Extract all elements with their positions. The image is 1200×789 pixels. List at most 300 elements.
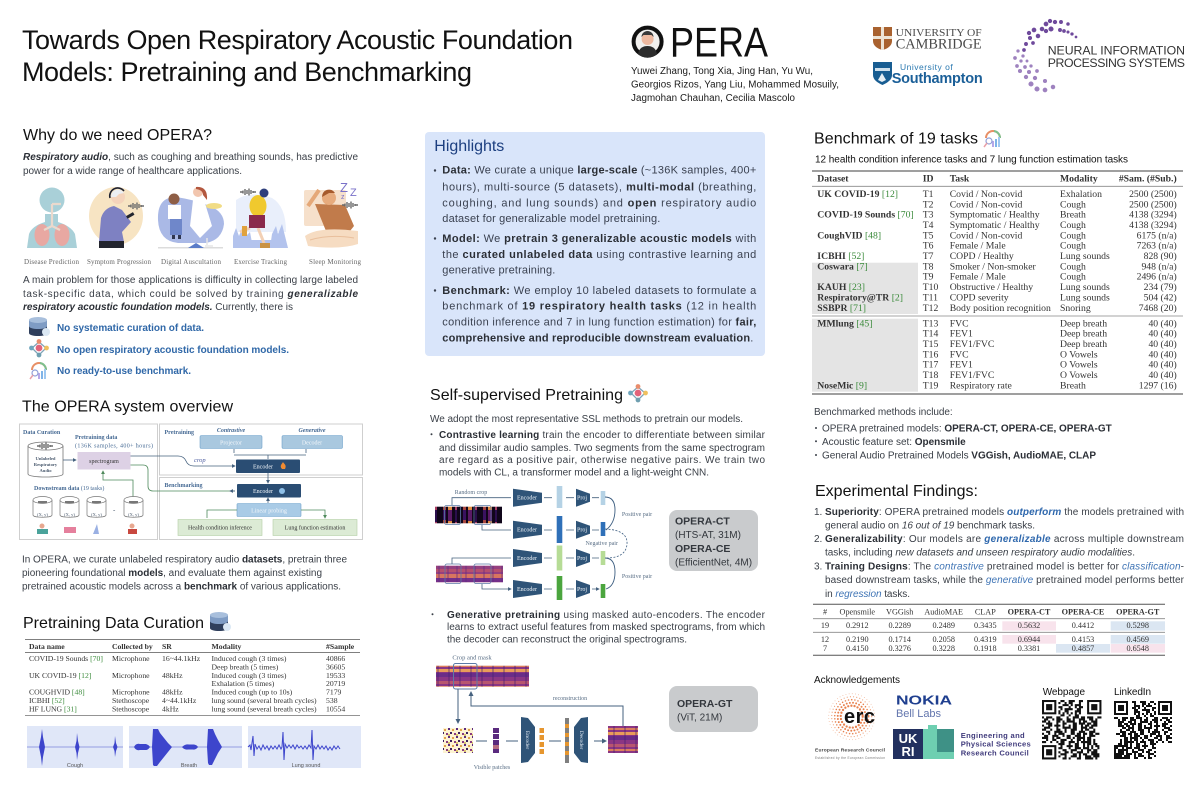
tasks table: Covid / Non-covid bbox=[950, 199, 1023, 210]
logo: UKRI EPSRC: RI bbox=[902, 744, 914, 759]
logo: NeurIPS bbox=[1014, 19, 1185, 92]
data table: lung sound (several breath cycles) bbox=[212, 696, 317, 705]
model box: OPERA-CT and OPERA-CE bbox=[669, 510, 758, 571]
model box: OPERA-GT: (ViT, 21M) bbox=[677, 712, 722, 724]
data table: SR bbox=[162, 642, 172, 651]
intro text: We adopt the most representative SSL methods to pretrain our models. bbox=[430, 414, 743, 425]
heading: Acknowledgements bbox=[814, 675, 900, 686]
system diagram bbox=[20, 424, 362, 540]
tasks table: T2 bbox=[923, 199, 934, 210]
results table: 0.6944 bbox=[1018, 635, 1040, 644]
logo: UKRI EPSRC: UK bbox=[899, 731, 918, 746]
gap: models: No open respiratory acoustic foundation models. bbox=[57, 345, 289, 356]
data table: 16~44.1kHz bbox=[162, 654, 201, 663]
tasks table: 40 (40) bbox=[1148, 349, 1177, 360]
contrastive diagram: Random crop bbox=[455, 490, 487, 496]
generative text: Generative pretraining using masked auto-encoders. The encoder bbox=[447, 610, 766, 621]
system diagram: Decoder bbox=[302, 440, 322, 446]
finding: superiority: 1. bbox=[814, 507, 822, 518]
finding: training designs: based downstream tasks, while the generative pretrained model performs better bbox=[825, 575, 1185, 586]
problem text: respiratory acoustic foundation models. Currently, there is bbox=[23, 302, 293, 313]
tasks table: UK COVID-19 [12] bbox=[817, 189, 898, 200]
data table: COUGHVID [48] bbox=[29, 688, 85, 696]
tasks table: COVID-19 Sounds [70] bbox=[817, 210, 914, 221]
tasks table: T13 bbox=[923, 318, 938, 329]
system diagram: (X, y) bbox=[37, 512, 48, 518]
tasks table: T10 bbox=[923, 282, 938, 293]
benchmarked methods: OPERA pretrained models: OPERA-CT, OPERA-CE, OPERA-GT bbox=[822, 424, 1112, 434]
intro text: power for a wide range of healthcare applications. bbox=[23, 166, 242, 177]
heading: Benchmark of 19 tasks bbox=[814, 130, 978, 148]
highlight: data: Data: We curate a unique large-scale (~136K samples, 400+ bbox=[442, 165, 756, 177]
model box: OPERA-CT and OPERA-CE: OPERA-CT bbox=[675, 516, 730, 528]
system diagram: Pretraining bbox=[164, 430, 194, 436]
tasks table: COPD severity bbox=[950, 292, 1009, 303]
system diagram: Pretraining data bbox=[75, 435, 117, 441]
tasks table: Female / Male bbox=[950, 241, 1006, 252]
tasks table: Lung sounds bbox=[1060, 292, 1110, 303]
benchmarked methods: Acoustic feature set: Opensmile bbox=[822, 437, 966, 448]
generative diagram: reconstruction bbox=[553, 696, 587, 702]
data table: 48kHz bbox=[162, 671, 183, 680]
waveform: lung sound: Lung sound bbox=[292, 763, 320, 769]
contrastive diagram: Proj bbox=[577, 496, 587, 502]
tasks table: T17 bbox=[923, 360, 938, 371]
tasks table: Female / Male bbox=[950, 272, 1006, 283]
tasks table: Symptomatic / Healthy bbox=[950, 220, 1040, 231]
system diagram: Projector bbox=[220, 440, 242, 446]
icon captions: Symptom Progression bbox=[87, 258, 152, 266]
panel: self-supervised pretraining bbox=[430, 384, 766, 771]
tasks table: Cough bbox=[1060, 261, 1086, 272]
tasks table: T18 bbox=[923, 370, 938, 381]
system diagram: (X, y) bbox=[91, 512, 102, 518]
intro text: Respiratory audio, such as coughing and breathing sounds, has predictive bbox=[23, 152, 358, 163]
heading: Pretraining Data Curation bbox=[23, 615, 204, 632]
results table: 0.6548 bbox=[1126, 644, 1149, 653]
icon: network bbox=[628, 384, 648, 402]
tasks table: T11 bbox=[923, 292, 938, 303]
highlight: data bbox=[434, 165, 756, 225]
tasks table: Breath bbox=[1060, 381, 1086, 392]
gap list bbox=[29, 317, 289, 379]
logo: NeurIPS: NEURAL INFORMATION bbox=[1048, 44, 1185, 58]
tasks table: T16 bbox=[923, 349, 938, 360]
tasks table: FEV1 bbox=[950, 360, 973, 371]
tasks table: 40 (40) bbox=[1148, 329, 1177, 340]
tasks table: Deep breath bbox=[1060, 329, 1107, 340]
finding: training designs: in regression tasks. bbox=[825, 589, 910, 600]
data table: Data name bbox=[29, 642, 65, 651]
tasks table: Respiratory rate bbox=[950, 381, 1012, 392]
tasks table: 40 (40) bbox=[1148, 370, 1177, 381]
contrastive text: models with CL, a transformer model and a light-weight CNN. bbox=[439, 468, 709, 478]
model box: OPERA-CT and OPERA-CE: OPERA-CE bbox=[675, 543, 730, 555]
QR: LinkedIn: LinkedIn bbox=[1114, 687, 1151, 698]
tasks table: Cough bbox=[1060, 220, 1086, 231]
results table: 0.4412 bbox=[1072, 621, 1094, 630]
tasks table: Smoker / Non-smoker bbox=[950, 261, 1037, 272]
gap: benchmark: No ready-to-use benchmark. bbox=[57, 366, 191, 377]
tasks table bbox=[812, 171, 1183, 394]
benchmarked methods bbox=[814, 407, 1112, 462]
system diagram: Contrastive bbox=[217, 428, 246, 434]
panel: pretraining data curation bbox=[23, 612, 361, 769]
logo: University of Southampton bbox=[873, 62, 983, 87]
generative diagram: Decoder bbox=[578, 731, 584, 749]
icon captions bbox=[24, 258, 362, 266]
tasks table: 948 (n/a) bbox=[1141, 261, 1177, 272]
highlight: model: Model: We pretrain 3 generalizable acoustic models with bbox=[442, 233, 756, 245]
system diagram: Linear probing bbox=[251, 508, 287, 514]
tasks table: T8 bbox=[923, 261, 934, 272]
generative text bbox=[432, 610, 766, 646]
tasks table: 4138 (3294) bbox=[1129, 220, 1177, 231]
tasks table: 7263 (n/a) bbox=[1137, 241, 1177, 252]
data table: 19533 bbox=[326, 671, 345, 680]
results table: 0.5298 bbox=[1126, 621, 1149, 630]
logo: NeurIPS: PROCESSING SYSTEMS bbox=[1048, 56, 1185, 70]
results table bbox=[813, 604, 1165, 655]
finding: training designs: Training Designs: The contrastive pretrained model is better for classification- bbox=[825, 562, 1184, 572]
generative diagram bbox=[436, 654, 638, 771]
tasks table: Cough bbox=[1060, 241, 1086, 252]
data table: 7179 bbox=[326, 688, 342, 696]
system diagram: Lung function estimation bbox=[285, 524, 345, 532]
highlight: data: coughing, and lung sounds) and open respiratory audio bbox=[442, 197, 756, 209]
authors: Jagmohan Chauhan, Cecilia Mascolo bbox=[631, 93, 796, 104]
system diagram: Audio bbox=[39, 468, 52, 473]
tasks table: Lung sounds bbox=[1060, 282, 1110, 293]
title: Towards Open Respiratory Acoustic Foundation bbox=[22, 25, 573, 55]
tasks table: Respiratory@TR [2] bbox=[817, 292, 903, 303]
data table: 4~44.1kHz bbox=[162, 696, 197, 705]
tasks table: #Sam. (#Sub.) bbox=[1119, 174, 1177, 185]
tasks table: ICBHI [52] bbox=[817, 251, 864, 262]
finding: superiority bbox=[814, 507, 1184, 532]
QR: LinkedIn bbox=[1114, 687, 1172, 758]
highlight: model: the curated unlabeled data using contrastive learning and bbox=[442, 249, 756, 261]
data table: Deep breath (5 times) bbox=[212, 662, 279, 672]
overview description: In OPERA, we curate unlabeled respiratory audio datasets, pretrain three bbox=[22, 554, 347, 566]
results table: 0.5632 bbox=[1018, 621, 1040, 630]
icon: sleep monitoring: Z bbox=[340, 180, 348, 195]
tasks table: T12 bbox=[923, 303, 938, 314]
finding: superiority: Superiority: OPERA pretrained models outperform the models pretrained with bbox=[825, 507, 1184, 518]
results table: 0.2190 bbox=[846, 635, 869, 644]
tasks table: Snoring bbox=[1060, 303, 1091, 314]
tasks table: COPD / Healthy bbox=[950, 251, 1014, 262]
waveform: cough: Cough bbox=[67, 763, 83, 769]
contrastive diagram: Negative pair bbox=[585, 541, 618, 547]
tasks table: 4138 (3294) bbox=[1129, 210, 1177, 221]
panel: highlights bbox=[425, 132, 765, 356]
results table: 19 bbox=[821, 621, 829, 630]
results table: Opensmile bbox=[840, 608, 875, 616]
generative text: the decoder can reconstruct the original spectrograms. bbox=[447, 634, 687, 646]
tasks table: FEV1/FVC bbox=[950, 339, 994, 350]
tasks table: SSBPR [71] bbox=[817, 303, 866, 314]
highlight: benchmark: condition inference and 7 in lung function estimation) for fair, bbox=[442, 317, 756, 329]
results table: 0.4857 bbox=[1072, 644, 1094, 653]
logo: ERC: erc bbox=[844, 706, 875, 728]
results table: 0.2289 bbox=[888, 621, 911, 630]
tasks table: 40 (40) bbox=[1148, 360, 1177, 371]
contrastive diagram: Proj bbox=[577, 587, 587, 593]
tasks table: MMlung [45] bbox=[817, 318, 872, 329]
tasks table: T5 bbox=[923, 230, 934, 241]
finding: training designs bbox=[814, 562, 1185, 600]
contrastive text: are regard as a positive pair, otherwise negative pairs. We train two bbox=[439, 455, 765, 466]
logo: Nokia Bell Labs: NOKIA bbox=[896, 692, 953, 708]
results table: 0.4319 bbox=[974, 635, 997, 644]
tasks table: T6 bbox=[923, 241, 934, 252]
contrastive diagram: Encoder bbox=[517, 496, 537, 502]
data table: Modality bbox=[212, 642, 242, 651]
system diagram: Benchmarking bbox=[164, 483, 203, 489]
data table: #Sample bbox=[326, 642, 355, 651]
system diagram: Unlabeled bbox=[36, 456, 56, 461]
data table: Microphone bbox=[112, 671, 150, 680]
tasks table: O Vowels bbox=[1060, 370, 1098, 381]
system diagram: - bbox=[113, 506, 116, 514]
tasks table: Task bbox=[950, 174, 970, 185]
system diagram: Downstream data (19 tasks) bbox=[34, 485, 104, 492]
logo: Nokia Bell Labs bbox=[896, 692, 953, 720]
overview description: pioneering foundational models, and evaluate them against existing bbox=[22, 568, 322, 579]
generative diagram: Visible patches bbox=[474, 765, 511, 771]
tasks table: 40 (40) bbox=[1148, 339, 1177, 350]
icon captions: Exercise Tracking bbox=[234, 258, 288, 266]
icon captions: Digital Auscultation bbox=[161, 258, 222, 266]
system diagram: Data Curation bbox=[23, 430, 61, 436]
tasks table: FVC bbox=[950, 318, 969, 329]
icon: network bbox=[29, 339, 49, 357]
problem text: A main problem for those applications is difficulty in collecting large labeled bbox=[23, 275, 358, 286]
icon: sleep monitoring: Z bbox=[350, 187, 357, 199]
tasks table: Cough bbox=[1060, 272, 1086, 283]
tasks table: Covid / Non-covid bbox=[950, 189, 1023, 200]
contrastive diagram: Encoder bbox=[517, 587, 537, 593]
tasks table: 40 (40) bbox=[1148, 318, 1177, 329]
results table: CLAP bbox=[975, 608, 996, 616]
icon: database bbox=[29, 317, 50, 336]
benchmarked methods: Benchmarked methods include: bbox=[814, 407, 953, 418]
data table: lung sound (several breath cycles) bbox=[212, 704, 317, 714]
results table: 0.4150 bbox=[846, 644, 869, 653]
tasks table: 1297 (16) bbox=[1139, 381, 1177, 392]
data table: 538 bbox=[326, 696, 338, 705]
logo: University of Cambridge: CAMBRIDGE bbox=[896, 36, 982, 52]
data table bbox=[25, 640, 360, 715]
logo: University of Southampton: Southampton bbox=[892, 71, 983, 87]
logo: University of Cambridge: UNIVERSITY OF bbox=[896, 27, 982, 39]
logo: ERC bbox=[815, 694, 886, 760]
system diagram: Health condition inference bbox=[188, 524, 252, 532]
results table: 0.2058 bbox=[932, 635, 955, 644]
contrastive diagram: Positive pair bbox=[622, 512, 652, 518]
data table: Exhalation (5 times) bbox=[212, 679, 275, 688]
data table: ICBHI [52] bbox=[29, 696, 65, 705]
authors bbox=[631, 66, 839, 104]
contrastive diagram: Proj bbox=[577, 556, 587, 562]
tasks table: Coswara [7] bbox=[817, 261, 868, 272]
tasks table: Covid / Non-covid bbox=[950, 230, 1023, 241]
tasks table: 2496 (n/a) bbox=[1137, 272, 1177, 283]
contrastive diagram: Encoder bbox=[517, 556, 537, 562]
waveform: breath bbox=[129, 726, 242, 769]
tasks table: 2500 (2500) bbox=[1129, 199, 1177, 210]
tasks table: T3 bbox=[923, 210, 934, 221]
tasks table: 504 (42) bbox=[1144, 292, 1177, 303]
icon: symptom progression bbox=[89, 187, 144, 248]
logo: UKRI EPSRC: Research Council bbox=[961, 748, 1029, 758]
system diagram: (X, y) bbox=[128, 512, 139, 518]
results table: 12 bbox=[821, 635, 829, 644]
tasks table: 2500 (2500) bbox=[1129, 189, 1177, 200]
results table: 0.3276 bbox=[888, 644, 911, 653]
system diagram: (X, y) bbox=[64, 512, 75, 518]
logo: OPERA: PERA bbox=[670, 19, 768, 66]
results table: OPERA-CT bbox=[1008, 608, 1051, 616]
gap: data: No systematic curation of data. bbox=[57, 323, 204, 334]
tasks table: O Vowels bbox=[1060, 360, 1098, 371]
icon: exercise tracking bbox=[233, 188, 288, 248]
contrastive diagram: Positive pair bbox=[622, 574, 652, 580]
tasks table: O Vowels bbox=[1060, 349, 1098, 360]
logo: Nokia Bell Labs: Bell Labs bbox=[896, 708, 942, 720]
data table: 40866 bbox=[326, 654, 345, 663]
icon: database bbox=[210, 612, 231, 631]
icon: benchmark bbox=[984, 131, 1000, 147]
results table: 0.2489 bbox=[932, 621, 955, 630]
results table: 0.4569 bbox=[1126, 635, 1149, 644]
tasks table: CoughVID [48] bbox=[817, 230, 881, 241]
highlight: data: hours), multi-source (5 datasets), multi-modal (breathing, bbox=[442, 181, 756, 193]
highlight: model bbox=[434, 233, 756, 277]
data table: HF LUNG [31] bbox=[29, 704, 77, 714]
panel: benchmark of 19 tasks bbox=[812, 130, 1183, 462]
tasks table: Body position recognition bbox=[950, 303, 1051, 314]
model box: OPERA-CT and OPERA-CE: (EfficientNet, 4M) bbox=[675, 558, 752, 568]
highlight: data: dataset for generalizable model pretraining. bbox=[442, 213, 660, 225]
tasks table: Modality bbox=[1060, 174, 1098, 185]
heading: The OPERA system overview bbox=[22, 398, 233, 416]
data table: Collected by bbox=[112, 642, 153, 651]
waveform: breath: Breath bbox=[181, 763, 197, 769]
tasks table: ID bbox=[923, 174, 933, 185]
logo: UKRI EPSRC: Engineering and bbox=[961, 731, 1025, 740]
logo: ERC: Established by the European Commission bbox=[815, 756, 885, 760]
tasks table: Dataset bbox=[817, 174, 849, 185]
data table: Stethoscope bbox=[112, 696, 150, 705]
tasks table: NoseMic [9] bbox=[817, 381, 867, 392]
heading: Why do we need OPERA? bbox=[23, 127, 212, 144]
results table: 0.1918 bbox=[974, 644, 997, 653]
tasks table: FEV1/FVC bbox=[950, 370, 994, 381]
panel: system overview bbox=[20, 398, 362, 592]
tasks table: 6175 (n/a) bbox=[1137, 230, 1177, 241]
highlight: benchmark: benchmark of 19 respiratory health tasks (12 in health bbox=[442, 301, 756, 313]
panel: experimental findings bbox=[813, 483, 1185, 655]
data table: UK COVID-19 [12] bbox=[29, 671, 91, 680]
data table: Induced cough (3 times) bbox=[212, 671, 287, 680]
model box: OPERA-GT: OPERA-GT bbox=[677, 698, 733, 710]
results table: AudioMAE bbox=[924, 608, 963, 616]
tasks table: Symptomatic / Healthy bbox=[950, 210, 1040, 221]
data table: 4kHz bbox=[162, 704, 179, 714]
finding: generalizability: tasks, including new datasets and unseen respiratory audio modalities. bbox=[825, 548, 1135, 558]
tasks table: T9 bbox=[923, 272, 934, 283]
heading: Self-supervised Pretraining bbox=[430, 387, 623, 404]
generative diagram: Encoder bbox=[524, 731, 530, 749]
tasks table: Breath bbox=[1060, 210, 1086, 221]
finding: superiority: general audio on 16 out of 19 benchmark tasks. bbox=[825, 520, 1035, 532]
panel: why do we need OPERA bbox=[23, 127, 362, 379]
finding: generalizability: 2. bbox=[814, 534, 822, 545]
authors: Yuwei Zhang, Tong Xia, Jing Han, Yu Wu, bbox=[631, 66, 813, 77]
heading: Experimental Findings: bbox=[815, 483, 978, 500]
results table: 0.2912 bbox=[846, 621, 869, 630]
contrastive text: and dissimilar audio samples. Two segments from the same spectrogram bbox=[439, 443, 765, 454]
logo: University of Cambridge bbox=[873, 27, 982, 52]
system diagram: (136K samples, 400+ hours) bbox=[75, 442, 153, 450]
logo: UKRI EPSRC bbox=[893, 725, 1031, 759]
data table: 20719 bbox=[326, 679, 345, 688]
highlight: benchmark: comprehensive and reproducible downstream evaluation. bbox=[442, 333, 753, 345]
contrastive diagram: Encoder bbox=[517, 528, 537, 534]
intro text bbox=[23, 152, 358, 177]
model box: OPERA-CT and OPERA-CE: (HTS-AT, 31M) bbox=[675, 530, 741, 541]
tasks table: KAUH [23] bbox=[817, 282, 865, 293]
subtitle: 12 health condition inference tasks and 7 lung function estimation tasks bbox=[815, 154, 1128, 166]
results table: OPERA-CE bbox=[1062, 608, 1105, 616]
system diagram: crop bbox=[194, 457, 206, 464]
icon: benchmark bbox=[30, 363, 46, 379]
results table: OPERA-GT bbox=[1116, 608, 1160, 616]
problem text bbox=[23, 275, 358, 313]
overview description: pretrained acoustic models across a benchmark of various applications. bbox=[22, 582, 341, 592]
system diagram: Generative bbox=[298, 428, 326, 434]
title: Models: Pretraining and Benchmarking bbox=[22, 57, 472, 87]
highlight: model: generative pretraining. bbox=[442, 265, 555, 277]
tasks table: T15 bbox=[923, 339, 938, 350]
QR: webpage bbox=[1042, 687, 1101, 758]
tasks table: Lung sounds bbox=[1060, 251, 1110, 262]
tasks table: T19 bbox=[923, 381, 938, 392]
contrastive diagram bbox=[435, 486, 652, 600]
data table: 48kHz bbox=[162, 688, 183, 696]
tasks table: Cough bbox=[1060, 230, 1086, 241]
results table: 0.4153 bbox=[1072, 635, 1094, 644]
highlight: benchmark: Benchmark: We employ 10 labeled datasets to formulate a bbox=[442, 285, 757, 297]
data table: Induced cough (up to 10s) bbox=[212, 688, 293, 696]
results table: 0.3435 bbox=[974, 621, 997, 630]
authors: Georgios Rizos, Yang Liu, Mohammed Mosuily, bbox=[631, 80, 839, 90]
finding: training designs: 3. bbox=[814, 562, 822, 572]
system diagram: spectrogram bbox=[89, 459, 119, 465]
data table: Stethoscope bbox=[112, 704, 150, 714]
contrastive text: Contrastive learning train the encoder to differentiate between similar bbox=[439, 430, 766, 441]
icon captions: Sleep Monitoring bbox=[309, 258, 362, 266]
results table: 0.3228 bbox=[932, 644, 955, 653]
heading: Highlights bbox=[434, 138, 504, 155]
model box: OPERA-GT bbox=[669, 686, 758, 732]
tasks table: T1 bbox=[923, 189, 934, 200]
tasks table: T14 bbox=[923, 329, 938, 340]
results table: VGGish bbox=[886, 608, 913, 616]
tasks table: Deep breath bbox=[1060, 318, 1107, 329]
